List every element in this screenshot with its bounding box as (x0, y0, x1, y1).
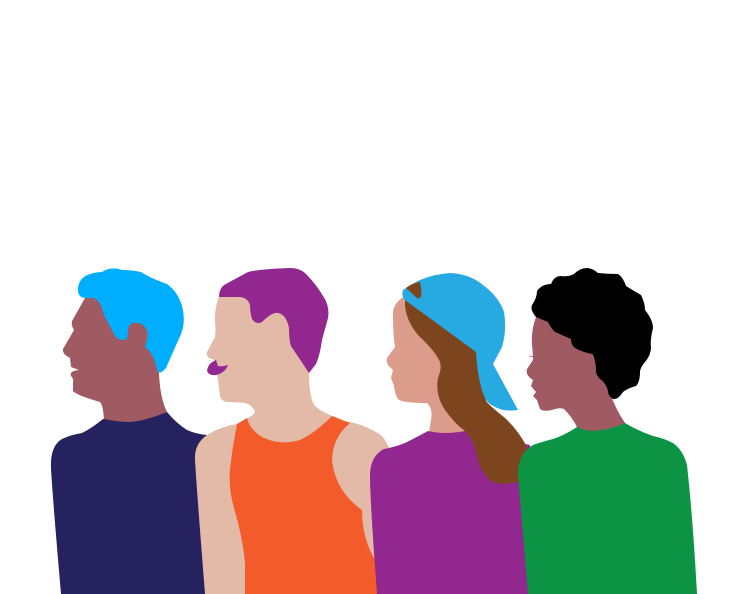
shirt: navy (51, 412, 215, 594)
person 2: orange tank top, purple hair (195, 268, 395, 594)
face and neck: skin (387, 297, 470, 436)
moustache: purple (207, 360, 228, 375)
cap: blue (402, 273, 518, 410)
person 3: purple shirt, blue cap, brown hair (370, 273, 530, 594)
cap strap gap: brown hair (406, 282, 421, 298)
hair: blue (78, 268, 184, 372)
hair: black (532, 268, 653, 399)
shirt: purple (370, 431, 530, 594)
left arm and shoulders: skin (195, 422, 395, 594)
hair: brown (405, 300, 527, 484)
face and neck: skin (527, 317, 625, 440)
shirt: green (518, 423, 697, 594)
head and neck: skin (207, 297, 332, 442)
tank top: orange (230, 416, 377, 594)
person 4: green shirt, black hair (518, 268, 697, 594)
head: skin (63, 297, 167, 422)
eyelash (529, 356, 535, 357)
person 1: navy shirt, blue hair (51, 268, 215, 594)
hair: purple (219, 268, 328, 373)
